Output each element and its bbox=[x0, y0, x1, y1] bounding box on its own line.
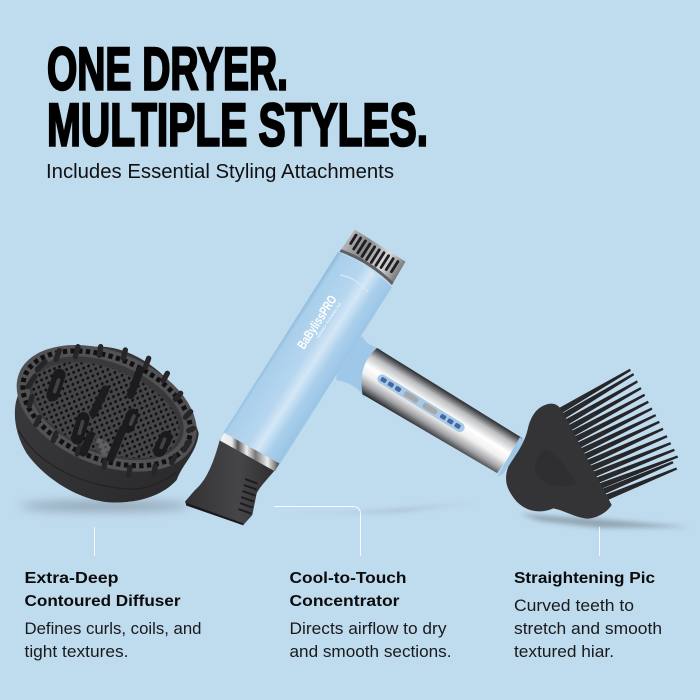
pic description: stretch and smooth bbox=[514, 620, 662, 638]
callout line: concentrator bbox=[274, 506, 360, 556]
concentrator heading: Concentrator bbox=[290, 593, 400, 610]
diffuser heading bbox=[24, 570, 180, 610]
text block: pic bbox=[514, 570, 662, 661]
dryer neck bbox=[336, 336, 382, 398]
diffuser heading: Contoured Diffuser bbox=[24, 593, 180, 610]
straightening pic attachment bbox=[506, 369, 678, 519]
callout line: diffuser bbox=[94, 527, 96, 556]
diffuser rim pins bbox=[28, 347, 193, 475]
concentrator description: and smooth sections. bbox=[290, 643, 452, 661]
title: MULTIPLE STYLES. bbox=[47, 92, 428, 158]
diffuser heading: Extra-Deep bbox=[24, 570, 119, 587]
diffuser bowl ridge bbox=[18, 430, 177, 489]
callout line: pic bbox=[598, 527, 600, 556]
diffuser description: Defines curls, coils, and bbox=[24, 620, 202, 638]
nozzle ribs bbox=[239, 479, 257, 513]
metal handle bbox=[350, 347, 522, 478]
concentrator description bbox=[290, 620, 452, 661]
diffuser floor highlight bbox=[95, 438, 115, 458]
diffuser inner pins bbox=[53, 370, 166, 458]
brand logo: BaBylissPRO bbox=[294, 292, 340, 352]
pic description: Curved teeth to bbox=[514, 597, 634, 615]
subtitle: Includes Essential Styling Attachments bbox=[46, 161, 394, 183]
pic head bbox=[506, 404, 612, 519]
brand logo: NANO TITANIUM bbox=[316, 302, 342, 340]
ground shadows bbox=[20, 501, 690, 528]
diffuser description: tight textures. bbox=[24, 643, 128, 661]
title: ONE DRYER. bbox=[47, 36, 288, 102]
dryer grill bbox=[340, 229, 406, 285]
concentrator heading bbox=[290, 570, 406, 610]
pic description: textured hiar. bbox=[514, 643, 614, 661]
pic teeth bbox=[554, 369, 678, 502]
dryer body bbox=[222, 252, 392, 467]
pic teeth root thickening bbox=[556, 396, 631, 500]
text block: concentrator bbox=[290, 570, 452, 661]
control panel bbox=[376, 373, 466, 434]
concentrator description: Directs airflow to dry bbox=[290, 620, 447, 638]
concentrator heading: Cool-to-Touch bbox=[290, 570, 406, 587]
dryer bbox=[185, 229, 525, 525]
diffuser rim bbox=[0, 320, 215, 496]
diffuser bowl bbox=[15, 347, 199, 502]
pic heading: Straightening Pic bbox=[514, 570, 655, 587]
text block: diffuser bbox=[24, 570, 202, 661]
pic description bbox=[514, 597, 662, 661]
handle end cap bbox=[497, 437, 525, 477]
concentrator nozzle bbox=[185, 433, 279, 525]
title bbox=[47, 36, 428, 158]
diffuser attachment bbox=[0, 320, 215, 502]
body highlight arc bbox=[340, 275, 368, 292]
diffuser description bbox=[24, 620, 202, 661]
pic head contour bbox=[535, 450, 577, 486]
brand logo bbox=[294, 292, 343, 354]
